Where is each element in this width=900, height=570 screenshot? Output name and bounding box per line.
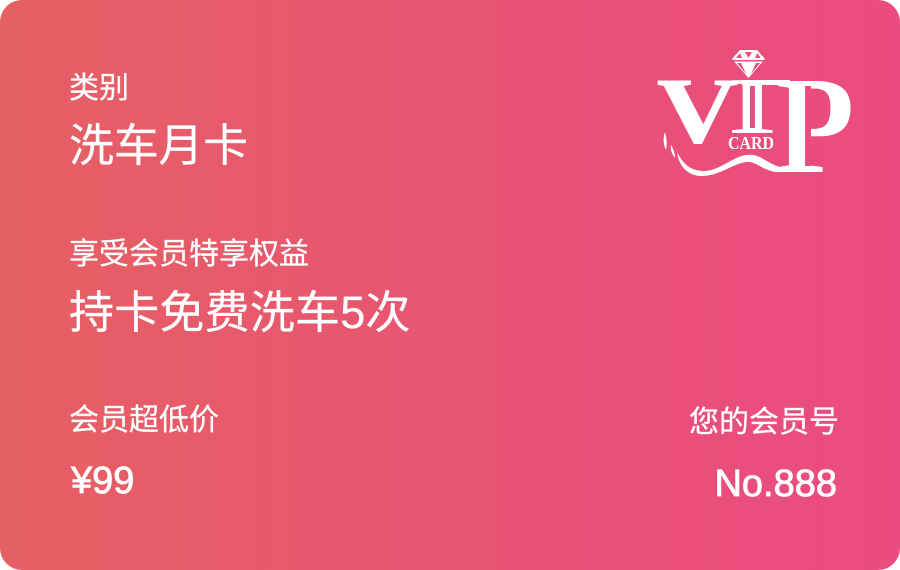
icon: ribbon swoosh	[664, 132, 792, 176]
value: member number: No.888	[714, 463, 837, 505]
label: member low price: 会员超低价	[69, 404, 219, 437]
logo text: I: I	[728, 61, 777, 151]
label: category: 类别	[69, 72, 129, 105]
label: member benefits: 享受会员特享权益	[69, 238, 309, 271]
logo text: V: V	[657, 60, 738, 163]
value: price: ¥99	[71, 460, 134, 502]
value: car wash monthly card: 洗车月卡	[69, 120, 248, 171]
icon: VIP card logo	[657, 48, 854, 190]
logo text: CARD: CARD	[728, 133, 774, 153]
label: your member number: 您的会员号	[689, 406, 839, 439]
icon: diamond	[732, 50, 765, 78]
value: five free washes: 持卡免费洗车5次	[69, 287, 411, 338]
